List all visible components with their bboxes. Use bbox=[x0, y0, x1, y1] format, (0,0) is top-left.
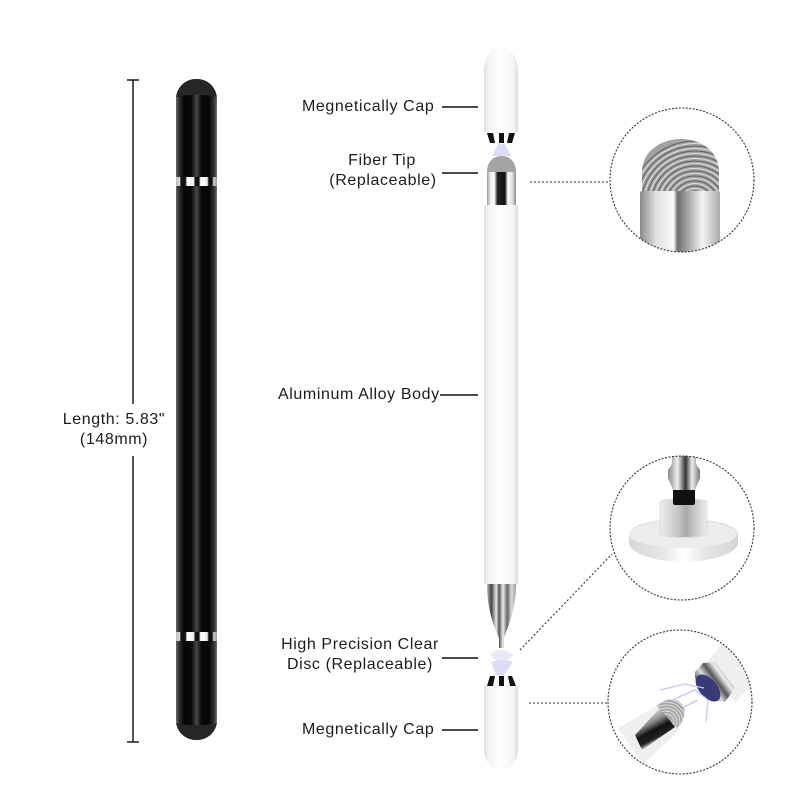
top cap bbox=[484, 47, 518, 132]
disc top face bbox=[629, 520, 737, 548]
bottom spark bbox=[491, 660, 513, 675]
label: clear disc: High Precision Clear bbox=[281, 636, 439, 653]
bottom cap bbox=[484, 686, 518, 770]
mesh dome bbox=[642, 139, 719, 192]
label: length: (148mm) bbox=[80, 431, 148, 448]
dotted connector: clear disc bbox=[520, 554, 612, 650]
dotted connector: fiber tip bbox=[530, 181, 610, 183]
metal barrel bbox=[640, 191, 720, 252]
label: fiber tip: Fiber Tip bbox=[348, 152, 416, 169]
bottom magnet contacts bbox=[487, 676, 516, 686]
detail circle: magnetic attraction bbox=[607, 630, 753, 774]
mesh tip bbox=[657, 699, 684, 728]
cap magnet face bbox=[696, 674, 720, 702]
black stylus pen bbox=[176, 79, 217, 740]
black joint bbox=[673, 489, 695, 505]
label: length: Length: 5.83" bbox=[63, 411, 165, 428]
label: length bbox=[63, 411, 165, 448]
white pen barrel, lower left bbox=[618, 704, 680, 764]
top spark bbox=[492, 144, 511, 156]
dimension line: pen length bbox=[127, 80, 139, 742]
disc stem bbox=[660, 499, 707, 538]
white stylus pen bbox=[484, 47, 518, 770]
detail circle: fiber tip bbox=[609, 108, 755, 252]
label: fiber tip: (Replaceable) bbox=[329, 172, 437, 189]
label: clear disc: Disc (Replaceable) bbox=[287, 656, 433, 673]
metal neck bbox=[668, 454, 700, 490]
clear disc bbox=[490, 650, 514, 660]
label: clear disc bbox=[281, 636, 478, 673]
label: bottom magnetic cap: Megnetically Cap bbox=[302, 721, 434, 738]
main aluminum body bbox=[484, 205, 518, 584]
disc base bbox=[629, 519, 738, 562]
detail circle: clear disc bbox=[610, 454, 754, 600]
label: aluminum body: Aluminum Alloy Body bbox=[278, 386, 440, 403]
top magnet contacts bbox=[487, 133, 515, 143]
white cap end, upper right bbox=[707, 644, 750, 702]
fiber tip mesh bbox=[487, 156, 516, 172]
label: fiber tip bbox=[329, 152, 478, 189]
chrome tip collar bbox=[635, 708, 675, 750]
chrome tip collar bbox=[487, 172, 516, 205]
lightning bbox=[660, 684, 708, 722]
label: top magnetic cap: Megnetically Cap bbox=[302, 98, 434, 115]
cap metal ring bbox=[695, 662, 735, 702]
dotted connector: magnetic cap bbox=[529, 702, 608, 704]
chrome cone bbox=[487, 584, 516, 648]
